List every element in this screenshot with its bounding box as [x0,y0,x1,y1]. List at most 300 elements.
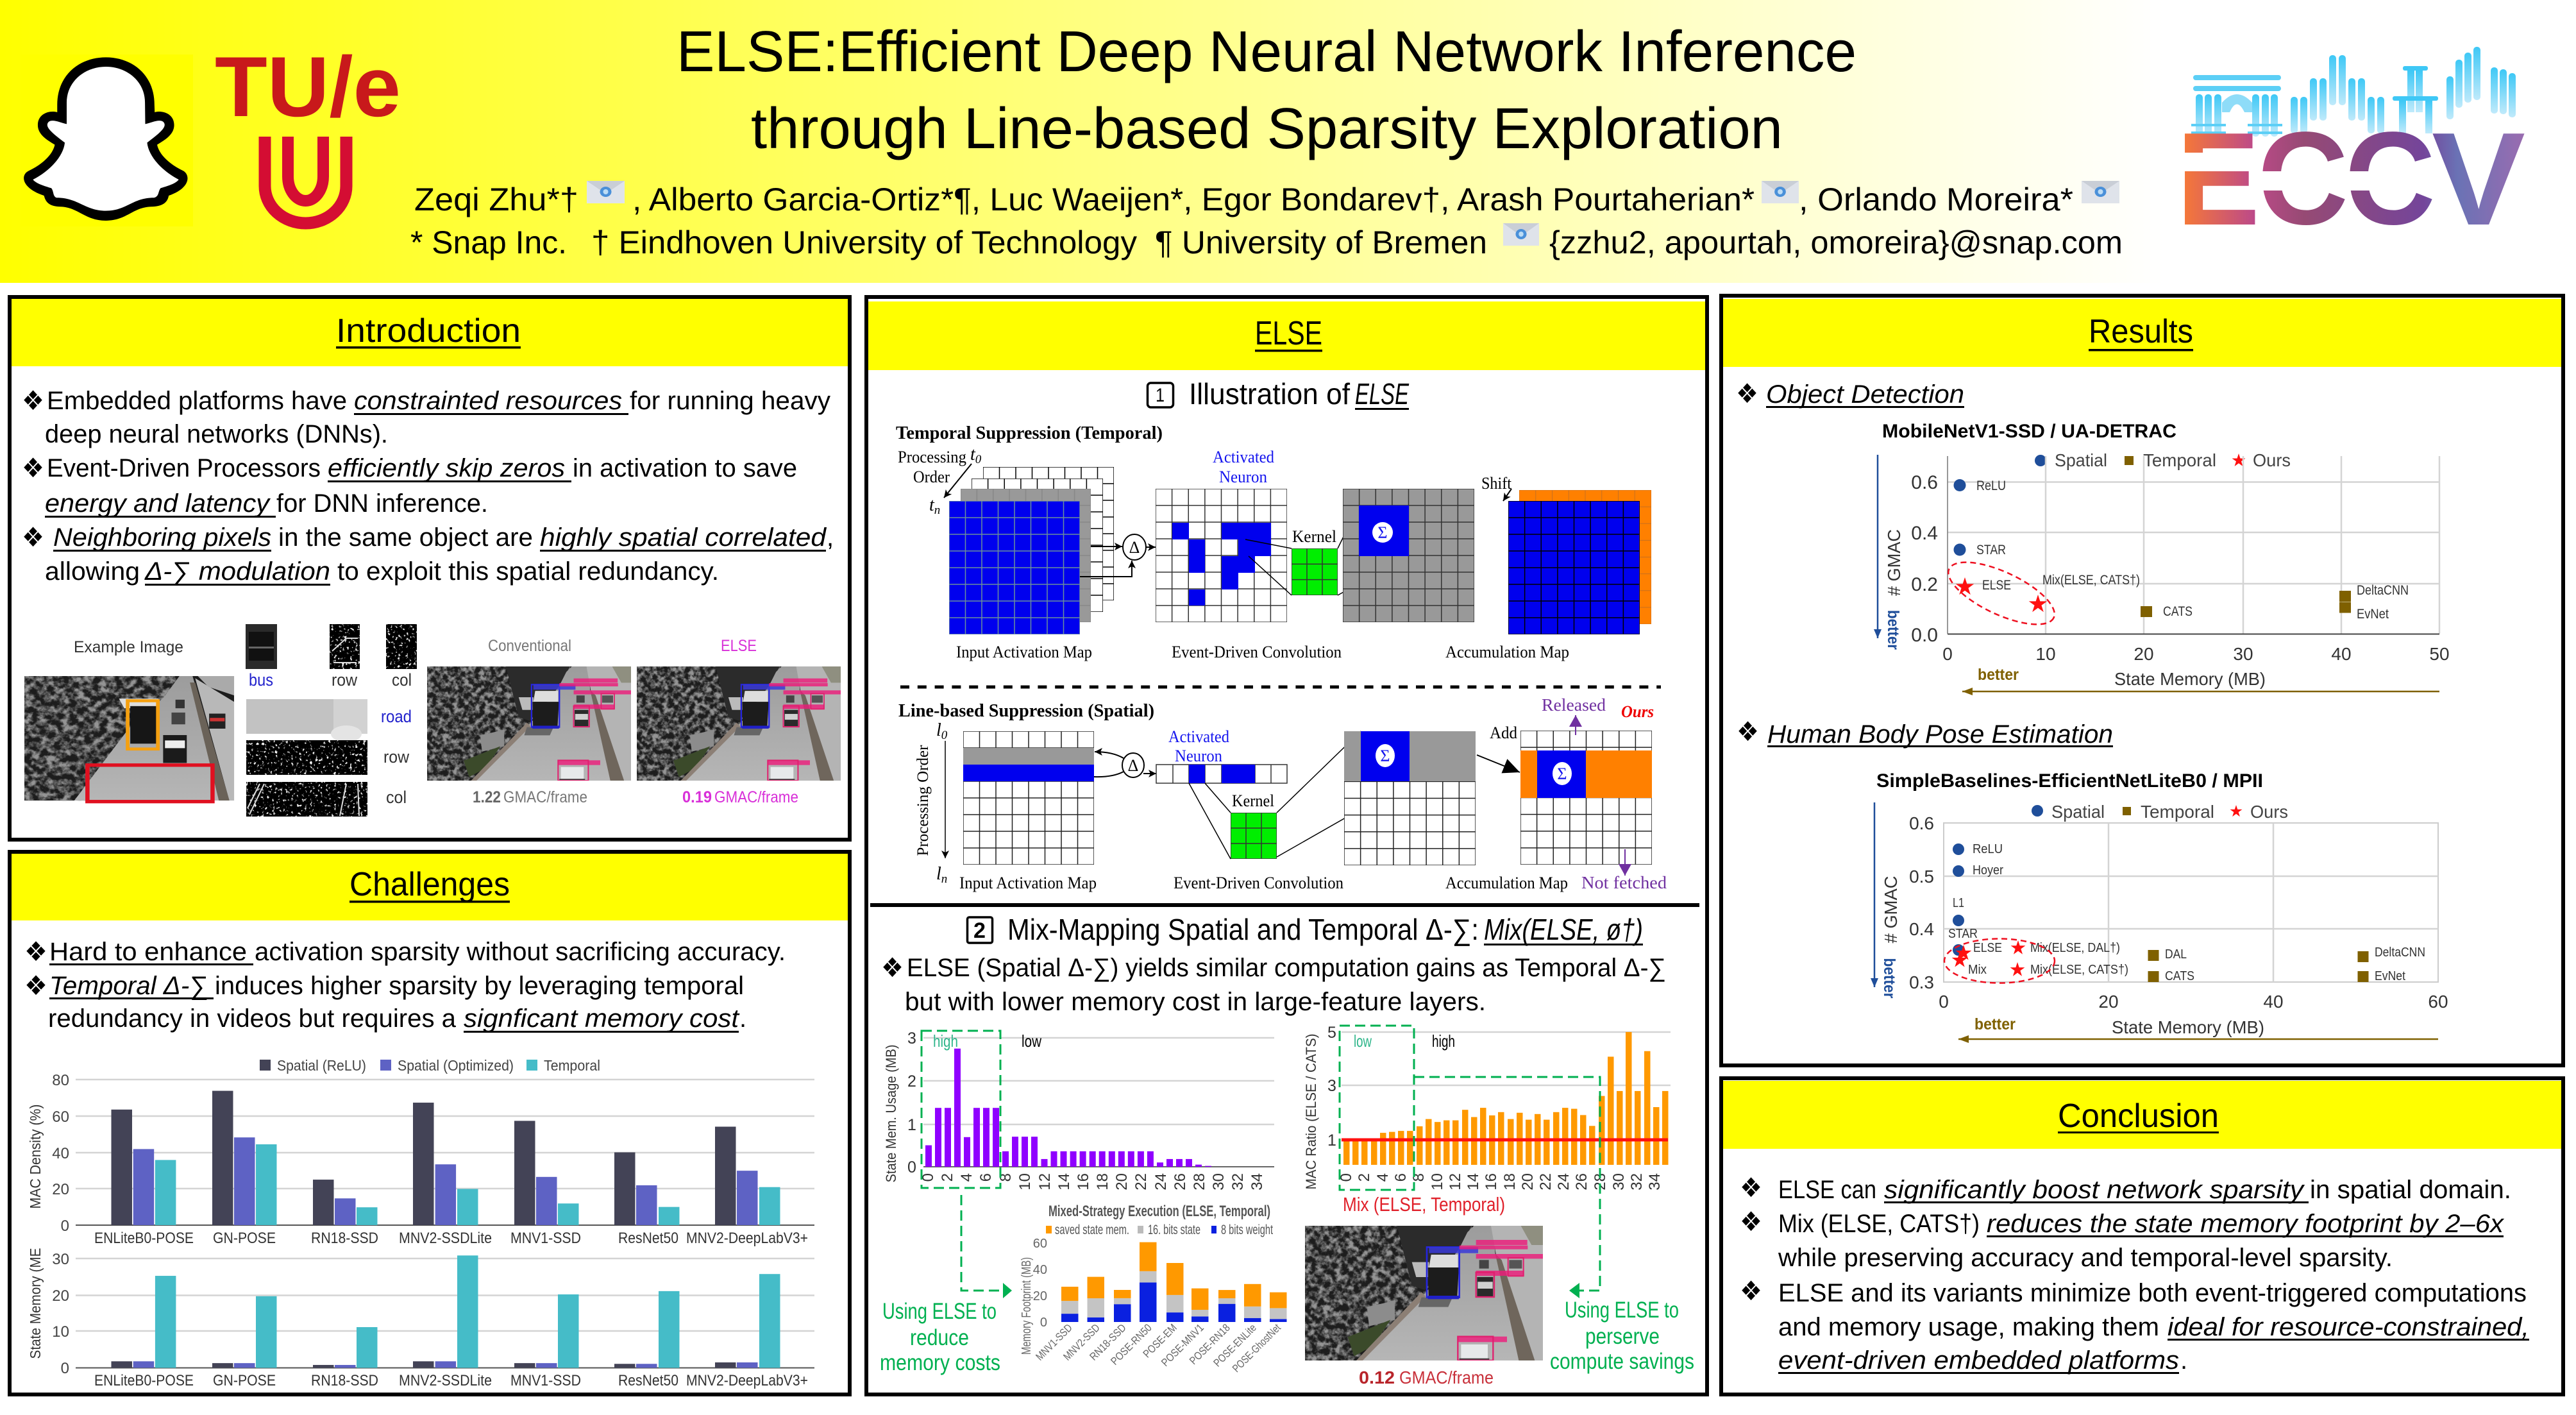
bar chart: MAC ratio per layer: high [1432,1031,1455,1051]
text block: reduce memory costs: memory costs [880,1350,1000,1375]
grid: accumulation map with released and not fetched lines: Ours [1621,702,1654,721]
bar chart: state memory usage per layer: 3 [907,1029,916,1047]
diagram: temporal suppression [896,423,1651,661]
scatter chart: MobileNetV1-SSD: MobileNetV1-SSD / UA-DETRAC [1882,421,2176,442]
bar chart: state memory usage per layer: 26 [1172,1173,1189,1190]
scatter chart: MobileNetV1-SSD: Mix(ELSE, CATS†) [2042,573,2140,588]
text block: conclusion bullets: ❖ [1740,1275,1762,1307]
text block: introduction bullets: to exploit this spatial redundancy. [337,557,719,586]
bar chart: MAC density: 20 [52,1181,69,1198]
image: bus crops: row [332,670,357,690]
bar chart: MAC ratio per layer: 4 [1374,1173,1392,1182]
bar chart: state memory: 0 [61,1360,69,1377]
icon: delta operator: Δ [1129,538,1140,557]
scatter chart: SimpleBaselines: 0.5 [1909,867,1934,886]
text block: introduction bullets: efficiently skip zeros [328,454,565,482]
text block: mix-mapping bullet: but with lower memory cost in large-feature layers. [905,988,1486,1016]
diagram: temporal suppression: Order [913,468,950,486]
bar chart: mixed-strategy execution: Mixed-Strategy Execution (ELSE, Temporal) [1048,1203,1270,1220]
bar chart: mixed-strategy execution: 8 bits weight [1221,1223,1273,1237]
panel: Introduction [10,297,850,840]
bar chart: MAC ratio per layer: 12 [1447,1173,1464,1190]
bar chart: MAC density: 0 [61,1217,69,1235]
text block: conclusion bullets: . [2180,1346,2187,1375]
text block: preserve compute savings: compute savings [1550,1349,1694,1374]
bar chart: state memory: 20 [52,1287,69,1305]
subheading: mix-mapping: 2 [973,919,986,943]
bar chart: MAC ratio per layer: 30 [1610,1173,1628,1190]
image: bus crops: col [392,670,412,690]
text block: conclusion bullets: ❖ [1740,1172,1762,1203]
text block: challenges bullets: signficant memory cost [464,1004,740,1033]
image: mix detection result: 0.12 [1359,1368,1395,1387]
bar chart: mixed-strategy execution: MNV1-SSD [1033,1321,1075,1363]
heading: Results [1723,299,2561,367]
grid: event-driven convolution: Neuron [1219,468,1267,486]
scatter chart: SimpleBaselines: 20 [2098,992,2119,1012]
image: conventional detection: 1.22 [473,788,501,806]
scatter chart: MobileNetV1-SSD: Temporal [2143,450,2216,470]
legend: MAC density [260,1057,600,1074]
bar chart: MAC ratio per layer: 0 [1338,1173,1355,1182]
scatter chart: MobileNetV1-SSD: # GMAC [1884,529,1904,596]
diagram: line-based suppression: Accumulation Map [1445,874,1568,892]
scatter chart: SimpleBaselines: L1 [1953,896,1964,910]
scatter chart: SimpleBaselines [1874,770,2448,1039]
bar chart: state memory usage per layer: State Mem. Usage (MB) [883,1044,899,1183]
grid: kernel [1245,505,1409,595]
grid: accumulation convolution: Σ [1380,747,1390,765]
text block: introduction bullets: Neighboring pixels [53,523,271,552]
bar chart: mixed-strategy execution: POSE-RN18 [1187,1321,1233,1367]
grid: accumulation convolution: Add [1490,724,1517,742]
bar chart: state memory usage per layer: 24 [1152,1173,1170,1190]
grid: event-driven row and kernel: Activated [1168,727,1229,746]
bar chart: state memory usage per layer: 28 [1191,1173,1208,1190]
diagram: temporal suppression: Accumulation Map [1445,643,1569,661]
subheading: illustration of ELSE: Illustration of [1189,377,1350,411]
bar chart: mixed-strategy execution: POSE-RN50 [1108,1321,1154,1368]
text block: conclusion bullets: ELSE can [1778,1176,1876,1204]
scatter chart: SimpleBaselines: DAL [2165,947,2187,962]
icon: delta operator [1080,534,1156,577]
text block: challenges bullets: ❖ [24,970,47,1001]
image: conventional detection: GMAC/frame [503,788,587,806]
text block: conclusion bullets: significantly boost network sparsity [1884,1176,2305,1204]
bar chart: MAC density: ResNet50 [618,1230,678,1247]
heading: Introduction [12,299,848,366]
bar chart: MAC density: ENLiteB0-POSE [94,1230,194,1247]
logo: ECCV: C [2344,105,2436,252]
diagram: temporal suppression: Input Activation Map [956,643,1092,661]
grid: accumulation convolution [1344,724,1520,865]
legend: MAC density: Spatial (Optimized) [398,1057,514,1074]
scatter chart: MobileNetV1-SSD: EvNet [2357,607,2389,622]
scatter chart: MobileNetV1-SSD: Ours [2253,450,2291,470]
scatter chart: MobileNetV1-SSD: 0.0 [1911,625,1938,646]
text block: introduction bullets: Event-Driven Processors [47,454,321,482]
text block: mix-mapping bullet: ❖ [881,952,904,983]
bar chart: state memory usage per layer: 10 [1016,1173,1034,1190]
bar chart: state memory: MNV2-SSDLite [399,1372,492,1389]
text block: conclusion bullets: ideal for resource-constrained, [2168,1313,2529,1341]
scatter chart: SimpleBaselines: 60 [2428,992,2448,1012]
scatter chart: MobileNetV1-SSD: better [1884,610,1902,650]
scatter chart: MobileNetV1-SSD: 0.2 [1911,574,1938,595]
bar chart: MAC ratio per layer: 2 [1356,1173,1373,1182]
bar chart: state memory usage per layer: 20 [1113,1173,1131,1190]
bar chart: state memory usage per layer [883,1029,1274,1190]
bar chart: MAC ratio per layer: 10 [1429,1173,1446,1190]
grid: accumulation map: Shift [1481,474,1512,493]
text block: introduction bullets: deep neural networks (DNNs). [45,420,388,448]
text block: conclusion bullets: and memory usage, making them [1778,1313,2159,1341]
text block: preserve compute savings [1550,1298,1694,1374]
bar chart: MAC density: MNV1-SSD [510,1230,581,1247]
bar chart: MAC density: 80 [52,1072,69,1089]
text block: introduction bullets: for running heavy [630,387,830,415]
scatter chart: SimpleBaselines: 0 [1939,992,1949,1012]
bar chart: state memory usage per layer: 18 [1094,1173,1111,1190]
scatter chart: SimpleBaselines: CATS [2165,969,2194,983]
authors: Zeqi Zhu*† [414,182,578,217]
bar chart: state memory usage per layer: 2 [939,1173,956,1182]
bar chart: mixed-strategy execution: 40 [1033,1263,1047,1277]
scatter chart: SimpleBaselines: EvNet [2375,969,2405,983]
bar chart: state memory usage per layer: 22 [1132,1173,1150,1190]
bar chart: state memory usage per layer: 30 [1210,1173,1227,1190]
logo: ECCV [2176,47,2525,253]
grid: accumulation map with released and not fetched lines [1520,695,1667,892]
scatter chart: SimpleBaselines: ELSE [1973,941,2002,955]
bar chart: MAC density: MAC Density (%) [27,1105,44,1208]
heading: ELSE: ELSE [1255,315,1322,352]
text block: conclusion bullets: reduces the state memory footprint by 2–6x [1987,1210,2505,1238]
scatter chart: MobileNetV1-SSD: 0 [1942,644,1953,664]
scatter chart: SimpleBaselines: SimpleBaselines-EfficientNetLiteB0 / MPII [1876,770,2263,792]
subheading: illustration of ELSE: ELSE [1355,377,1410,411]
text block: introduction bullets [22,385,834,586]
diagram: temporal suppression: Event-Driven Convolution [1172,643,1342,661]
bar chart: MAC ratio per layer: 8 [1410,1173,1427,1182]
scatter chart: MobileNetV1-SSD: ReLU [1976,479,2006,493]
scatter chart: SimpleBaselines: better [1974,1015,2016,1033]
text block: introduction bullets: , [827,523,834,552]
bar chart: state memory [27,1248,814,1389]
bar chart: MAC ratio per layer: 16 [1483,1173,1500,1190]
text block: conclusion bullets: ❖ [1740,1206,1762,1237]
bar chart: state memory usage per layer: 12 [1036,1173,1054,1190]
text block: conclusion bullets: while preserving accuracy and temporal-level sparsity. [1778,1244,2393,1272]
bar chart: state memory usage per layer: 0 [907,1158,916,1176]
heading: Introduction: Introduction [336,312,521,350]
diagram: line-based suppression: Processing Order [914,745,932,856]
bar chart: MAC ratio per layer: 32 [1628,1173,1646,1190]
grid: accumulation map with released and not fetched lines: Not fetched [1581,873,1667,892]
bar chart: state memory usage per layer: 0 [920,1173,937,1182]
diagram: temporal suppression: Temporal Suppression (Temporal) [896,423,1163,443]
scatter chart: MobileNetV1-SSD: CATS [2163,604,2193,619]
text block: introduction bullets: in activation to save [573,454,797,482]
text block: reduce memory costs: Using ELSE to [882,1299,997,1324]
text block: conclusion bullets: Mix (ELSE, CATS†) [1778,1210,1980,1238]
scatter chart: MobileNetV1-SSD: 10 [2035,644,2056,664]
logo: ECCV: C [2257,105,2348,252]
bar chart: state memory usage per layer: 1 [907,1116,916,1134]
bar chart: state memory: GN-POSE [213,1372,276,1389]
bar chart: state memory: MNV2-DeepLabV3+ [686,1372,808,1389]
logo: TU/e: TU/e [215,40,401,135]
bar chart: state memory: MNV1-SSD [510,1372,581,1389]
icon: delta operator: Δ [1128,756,1138,775]
image: example road scene: Example Image [74,638,183,656]
diagram: temporal suppression: n [934,504,940,517]
bar chart: mixed-strategy execution: 0 [1040,1316,1047,1330]
text block: preserve compute savings: perserve [1585,1324,1660,1349]
scatter chart: MobileNetV1-SSD: 30 [2233,644,2253,664]
bar chart: MAC ratio per layer: 34 [1646,1173,1663,1190]
diagram: temporal suppression: 0 [975,453,982,466]
bar chart: state memory: 10 [52,1323,69,1341]
scatter chart: MobileNetV1-SSD [1878,421,2450,691]
scatter chart: MobileNetV1-SSD: DeltaCNN [2357,583,2409,598]
authors: , Orlando Moreira* [1799,182,2073,217]
scatter chart: MobileNetV1-SSD: 40 [2331,644,2352,664]
bar chart: MAC density: 60 [52,1108,69,1126]
bar chart: mixed-strategy execution [1020,1203,1286,1375]
subheading: human body pose estimation: Human Body Pose Estimation [1767,720,2113,749]
scatter chart: SimpleBaselines: Temporal [2141,802,2214,822]
image: conventional detection [427,637,631,806]
text block: challenges bullets: redundancy in videos but requires a [48,1004,457,1033]
bar chart: mixed-strategy execution: MNV2-SSD [1061,1321,1102,1363]
scatter chart: SimpleBaselines: Hoyer [1973,863,2003,877]
text block: introduction bullets: ❖ [22,521,44,553]
subheading: human body pose estimation: ❖ [1737,716,1759,747]
text block: challenges bullets [24,936,786,1033]
scatter chart: MobileNetV1-SSD: ELSE [1982,578,2011,593]
affiliations: * Snap Inc. [410,225,567,260]
bar chart: state memory usage per layer: low [1022,1031,1041,1051]
logo: Snapchat ghost [21,55,193,226]
bar chart: MAC ratio per layer [1303,1024,1671,1190]
scatter chart: SimpleBaselines: Spatial [2051,802,2105,822]
heading: ELSE [868,301,1705,370]
diagram: line-based suppression [898,695,1667,892]
text block: introduction bullets: in the same object are [278,523,533,552]
scatter chart: MobileNetV1-SSD: 20 [2134,644,2154,664]
bar chart: MAC ratio per layer: 3 [1327,1077,1336,1095]
title: ELSE:Efficient Deep Neural Network Inference [677,20,1856,84]
bar chart: mixed-strategy execution: 20 [1033,1289,1047,1303]
diagram: line-based suppression: l [936,864,941,884]
image: road crops: row [383,747,409,767]
bar chart: MAC density [27,1072,814,1247]
legend: MAC density: Temporal [544,1057,600,1074]
bar chart: mixed-strategy execution: POSE-EM [1141,1321,1179,1360]
image: ELSE detection [637,637,841,806]
bar chart: MAC ratio per layer: 1 [1327,1131,1336,1149]
bar chart: mixed-strategy execution: RN18-SSD [1087,1321,1129,1363]
bar chart: mixed-strategy execution: saved state mem. [1055,1223,1129,1237]
scatter chart: SimpleBaselines: ReLU [1973,842,2003,856]
scatter chart: MobileNetV1-SSD: Spatial [2055,450,2107,470]
image: ELSE detection: GMAC/frame [714,788,798,806]
scatter chart: SimpleBaselines: Mix(ELSE, DAL†) [2030,941,2120,955]
text block: mix-mapping bullet: ELSE (Spatial Δ-∑) yields similar computation gains as Temporal Δ-∑ [907,954,1666,982]
logo: TU/e [215,40,401,223]
subheading: mix-mapping: Mix-Mapping Spatial and Temporal Δ-∑: [1007,913,1479,946]
scatter chart: MobileNetV1-SSD: STAR [1976,543,2006,557]
grid: kernel: Kernel [1292,527,1336,546]
text block: introduction bullets: ❖ [22,385,44,416]
logo: ECCV: E [2176,105,2260,253]
image: mix detection result: GMAC/frame [1399,1368,1494,1387]
scatter chart: SimpleBaselines: # GMAC [1881,876,1901,943]
grid: event-driven convolution [1156,448,1287,622]
subheading: illustration of ELSE: 1 [1156,385,1165,406]
text block: challenges bullets: activation sparsity without sacrificing accuracy. [255,938,786,966]
legend: MAC density: Spatial (ReLU) [277,1057,366,1074]
logo: ECCV: V [2432,105,2525,253]
grid: accumulation convolution [1343,489,1474,622]
scatter chart: SimpleBaselines: 40 [2263,992,2284,1012]
scatter chart: MobileNetV1-SSD: 50 [2429,644,2450,664]
image: mix detection result [1305,1193,1543,1387]
bar chart: MAC density: MNV2-DeepLabV3+ [686,1230,808,1247]
diagram: line-based suppression: 0 [941,729,948,742]
bar chart: state memory: ENLiteB0-POSE [94,1372,194,1389]
bar chart: mixed-strategy execution: Memory Footprint (MB) [1020,1257,1034,1355]
diagram: temporal suppression: t [929,495,934,515]
bar chart: MAC density: MNV2-SSDLite [399,1230,492,1247]
heading: Challenges: Challenges [349,866,510,903]
grid: accumulation map with released and not fetched lines: Σ [1557,765,1567,783]
bar chart: state memory usage per layer: 8 [997,1173,1014,1182]
arrow: high-memory layers to mixed strategy chart [961,1195,1012,1298]
text block: conclusion bullets: ELSE and its variants minimize both event-triggered computations [1778,1279,2527,1307]
bar chart: MAC ratio per layer: 18 [1501,1173,1519,1190]
scatter chart: SimpleBaselines: 0.3 [1909,972,1934,992]
arrow: high-compute layers to mix result [1414,1077,1600,1298]
authors [414,181,2119,217]
image: road crops [246,699,412,817]
text block: introduction bullets: ❖ [22,452,44,484]
scatter chart: MobileNetV1-SSD: 0.6 [1911,472,1938,493]
grid: accumulation map with released and not fetched lines: Released [1542,695,1606,715]
text block: challenges bullets: induces higher sparsity by leveraging temporal [215,972,744,1000]
image: road crops: col [386,788,407,807]
scatter chart: SimpleBaselines: Mix [1968,963,1987,977]
bar chart: MAC ratio per layer: 22 [1537,1173,1554,1190]
grid: accumulation convolution: Σ [1377,523,1388,542]
text block: preserve compute savings: Using ELSE to [1565,1298,1679,1323]
diagram: line-based suppression: Input Activation Map [959,874,1097,892]
heading: Challenges [12,854,848,920]
bar chart: mixed-strategy execution: 16. bits state [1148,1223,1200,1237]
bar chart: MAC ratio per layer: low [1354,1031,1372,1051]
bar chart: MAC ratio per layer: 6 [1392,1173,1410,1182]
text block: conclusion bullets: in spatial domain. [2310,1176,2511,1204]
diagram: line-based suppression: n [941,872,947,886]
text block: reduce memory costs [880,1299,1000,1375]
heading: Results: Results [2089,313,2193,350]
bar chart: MAC ratio per layer: 24 [1555,1173,1572,1190]
panel: ELSE [866,297,1707,1394]
bar chart: MAC density: 40 [52,1145,69,1162]
text block: introduction bullets: constrainted resources [354,387,622,415]
bar chart: state memory usage per layer: 4 [958,1173,975,1182]
image: mix detection result: Mix (ELSE, Temporal) [1343,1193,1505,1216]
scatter chart: SimpleBaselines: State Memory (MB) [2112,1017,2264,1037]
affiliations: {zzhu2, apourtah, omoreira}@snap.com [1549,225,2123,260]
text block: challenges bullets: . [739,1004,746,1033]
image: ELSE detection: ELSE [721,637,757,655]
text block: challenges bullets: Temporal Δ-∑ [49,972,208,1000]
text block: introduction bullets: energy and latency [45,489,271,518]
image: bus crops [246,624,417,690]
bar chart: MAC density: RN18-SSD [311,1230,378,1247]
text block: introduction bullets: highly spatial correlated [540,523,827,552]
diagram: line-based suppression: Event-Driven Convolution [1174,874,1343,892]
text block: introduction bullets: for DNN inference. [276,489,488,518]
title: through Line-based Sparsity Exploration [751,97,1783,161]
diagram: temporal suppression: Processing [898,448,966,466]
scatter chart: SimpleBaselines: Mix(ELSE, CATS†) [2030,963,2128,977]
scatter chart: SimpleBaselines: 0.4 [1909,919,1934,939]
text block: conclusion bullets [1740,1172,2529,1375]
panel: Challenges [10,852,850,1394]
text block: conclusion bullets: event-driven embedded platforms [1778,1346,2179,1375]
affiliations [410,223,2123,260]
diagram: temporal suppression: t [970,445,975,464]
heading: Conclusion: Conclusion [2058,1097,2219,1135]
panel: Conclusion [1721,1078,2563,1394]
bar chart: state memory usage per layer: 14 [1056,1173,1073,1190]
bar chart: MAC ratio per layer: 28 [1592,1173,1609,1190]
scatter chart: SimpleBaselines: 0.6 [1909,813,1934,833]
bar chart: mixed-strategy execution: POSE-GhostNet [1230,1321,1283,1375]
grid: event-driven row and kernel [1156,727,1410,859]
grid: input activation map stack [949,467,1114,634]
panel: Results [1721,296,2563,1065]
grid: event-driven row and kernel: Kernel [1232,792,1274,810]
scatter chart: MobileNetV1-SSD: 0.4 [1911,523,1938,544]
grid: event-driven row and kernel: Neuron [1175,747,1222,765]
text block: mix-mapping bullet [881,952,1666,1016]
image: bus crops: bus [249,670,273,690]
bar chart: MAC ratio per layer: 14 [1465,1173,1482,1190]
image: conventional detection: Conventional [488,637,571,655]
text block: challenges bullets: Hard to enhance [49,938,247,966]
scatter chart: SimpleBaselines: Ours [2250,802,2288,822]
grid: input activation map [963,731,1094,865]
diagram: line-based suppression: l [936,720,941,740]
scatter chart: SimpleBaselines: STAR [1948,927,1978,941]
title [677,20,1856,161]
subheading: mix-mapping: Mix(ELSE, ø†) [1484,913,1643,946]
affiliations: † Eindhoven University of Technology [591,225,1137,260]
image: example road scene [24,638,234,802]
bar chart: state memory usage per layer: 34 [1249,1173,1266,1190]
bar chart: MAC density: GN-POSE [213,1230,276,1247]
bar chart: MAC ratio per layer: 20 [1519,1173,1536,1190]
bar chart: state memory usage per layer: 6 [977,1173,995,1182]
subheading: illustration of ELSE [1148,377,1410,411]
text block: challenges bullets: ❖ [24,936,47,967]
scatter chart: SimpleBaselines: better [1880,958,1898,999]
subheading: object detection: Object Detection [1766,380,1964,409]
